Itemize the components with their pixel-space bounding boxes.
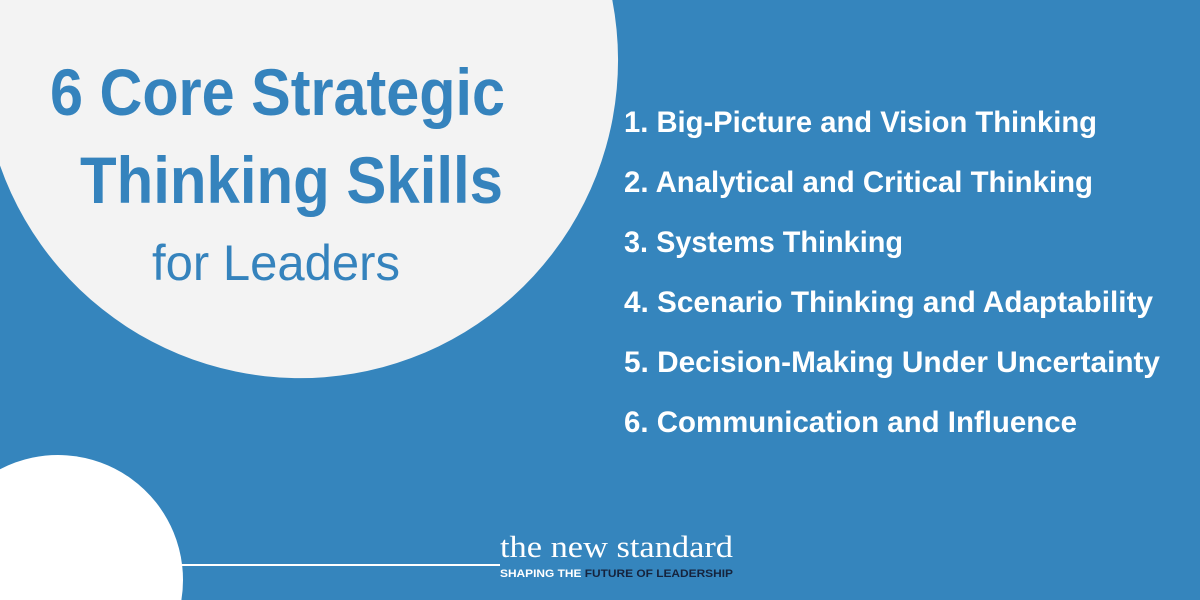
decorative large light circle	[0, 0, 618, 378]
item 1: 1. Big-Picture and Vision Thinking	[624, 106, 1097, 139]
item 6: 6. Communication and Influence	[624, 406, 1077, 439]
item 3: 3. Systems Thinking	[624, 226, 903, 259]
logo	[182, 529, 734, 580]
logo: SHAPING THE FUTURE OF LEADERSHIP	[500, 568, 733, 580]
logo: the new standard	[500, 529, 734, 564]
title: 6 Core Strategic	[50, 55, 505, 129]
item 4: 4. Scenario Thinking and Adaptability	[624, 286, 1153, 319]
item 2: 2. Analytical and Critical Thinking	[624, 166, 1093, 199]
title	[50, 55, 505, 291]
decorative small white circle	[0, 455, 183, 600]
item 5: 5. Decision-Making Under Uncertainty	[624, 346, 1160, 379]
skills list	[624, 106, 1160, 439]
title: Thinking Skills	[80, 143, 503, 217]
title: for Leaders	[152, 235, 400, 291]
